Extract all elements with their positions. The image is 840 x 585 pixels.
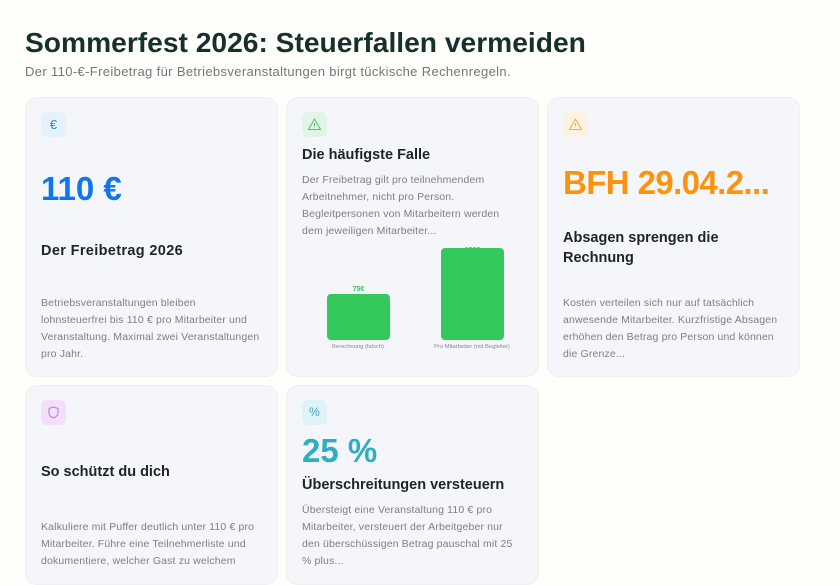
bar label: Berechnung (falsch): Berechnung (falsch): [332, 344, 384, 350]
text: Absagen sprengen die Rechnung: [563, 297, 777, 360]
text: Die häufigste Falle: Arbeitnehmer, nicht pro Person.: [302, 191, 454, 203]
text: So schützt du dich: [41, 521, 254, 567]
panel: Überschreitungen versteuern: [286, 385, 539, 585]
text: Der Freibetrag 2026: Betriebsveranstaltungen bleiben: [41, 297, 196, 309]
text: Absagen sprengen die Rechnung: anwesende Mitarbeiter. Kurzfristige Absagen: [563, 314, 777, 326]
panel: Absagen sprengen die Rechnung: [547, 97, 800, 377]
stat: 25 %: 25 %: [302, 432, 377, 469]
icon: euro: €: [50, 117, 57, 132]
text: Überschreitungen versteuern: Übersteigt eine Veranstaltung 110 € pro: [302, 504, 492, 516]
heading: Der Freibetrag 2026: Der Freibetrag 2026: [41, 243, 183, 259]
heading: Überschreitungen versteuern: Überschreitungen versteuern: [302, 477, 504, 493]
heading: Die häufigste Falle: Die häufigste Falle: [302, 147, 430, 163]
bar: Berechnung (falsch): [327, 294, 390, 340]
bar value: 150€: 150€: [465, 247, 480, 254]
text: Die häufigste Falle: Begleitpersonen von Mitarbeitern werden: [302, 208, 499, 220]
stat: BFH 29.04.2...: BFH 29.04.2...: [563, 164, 769, 201]
icon: percent: %: [309, 405, 320, 419]
panel: Der Freibetrag 2026: [25, 97, 278, 377]
text: Absagen sprengen die Rechnung: die Grenze...: [563, 348, 625, 360]
icon: warning green: [302, 112, 327, 137]
text: Überschreitungen versteuern: den überschüssigen Betrag pauschal mit 25: [302, 538, 512, 550]
heading: Absagen sprengen die Rechnung: Absagen sprengen die: [563, 230, 719, 246]
text: Der Freibetrag 2026: pro Jahr.: [41, 348, 83, 360]
text: Der Freibetrag 2026: [41, 297, 259, 360]
panel: Die häufigste Falle: [286, 97, 539, 377]
text: So schützt du dich: dokumentiere, welcher Gast zu welchem: [41, 555, 236, 567]
heading: Absagen sprengen die Rechnung: Rechnung: [563, 250, 634, 266]
text: Absagen sprengen die Rechnung: Kosten verteilen sich nur auf tatsächlich: [563, 297, 754, 309]
text: Absagen sprengen die Rechnung: erhöhen den Betrag pro Person und können: [563, 331, 774, 343]
text: So schützt du dich: Mitarbeiter. Führe eine Teilnehmerliste und: [41, 538, 246, 550]
text: So schützt du dich: Kalkuliere mit Puffer deutlich unter 110 € pro: [41, 521, 254, 533]
subtitle: Der 110-€-Freibetrag für Betriebsveranstaltungen birgt tückische Rechenregeln.: [25, 64, 511, 79]
text: Die häufigste Falle: Der Freibetrag gilt pro teilnehmendem: [302, 174, 484, 186]
heading: So schützt du dich: So schützt du dich: [41, 464, 170, 480]
text: Überschreitungen versteuern: % plus...: [302, 555, 344, 567]
text: Der Freibetrag 2026: lohnsteuerfrei bis 110 € pro Mitarbeiter und: [41, 314, 247, 326]
bar label: Pro Mitarbeiter (mit Begleiter): Pro Mitarbeiter (mit Begleiter): [434, 344, 510, 350]
icon: shield: [41, 400, 66, 425]
icon: percent: [302, 400, 327, 425]
heading: Absagen sprengen die Rechnung: [563, 230, 719, 266]
bar chart: [327, 247, 510, 350]
title: Sommerfest 2026: Steuerfallen vermeiden: [25, 26, 586, 58]
text: Die häufigste Falle: [302, 174, 499, 237]
text: Die häufigste Falle: dem jeweiligen Mitarbeiter...: [302, 225, 436, 237]
text: Überschreitungen versteuern: Mitarbeiter, versteuert der Arbeitgeber nur: [302, 521, 503, 533]
icon: warning orange: [563, 112, 588, 137]
text: Überschreitungen versteuern: [302, 504, 512, 567]
icon: euro: [41, 112, 66, 137]
bar value: 75€: 75€: [353, 286, 364, 293]
panel: So schützt du dich: [25, 385, 278, 585]
bar: Pro Mitarbeiter (mit Begleiter): [441, 248, 504, 340]
text: Der Freibetrag 2026: Veranstaltung. Maximal zwei Veranstaltungen: [41, 331, 259, 343]
stat: 110 €: 110 €: [41, 170, 122, 207]
